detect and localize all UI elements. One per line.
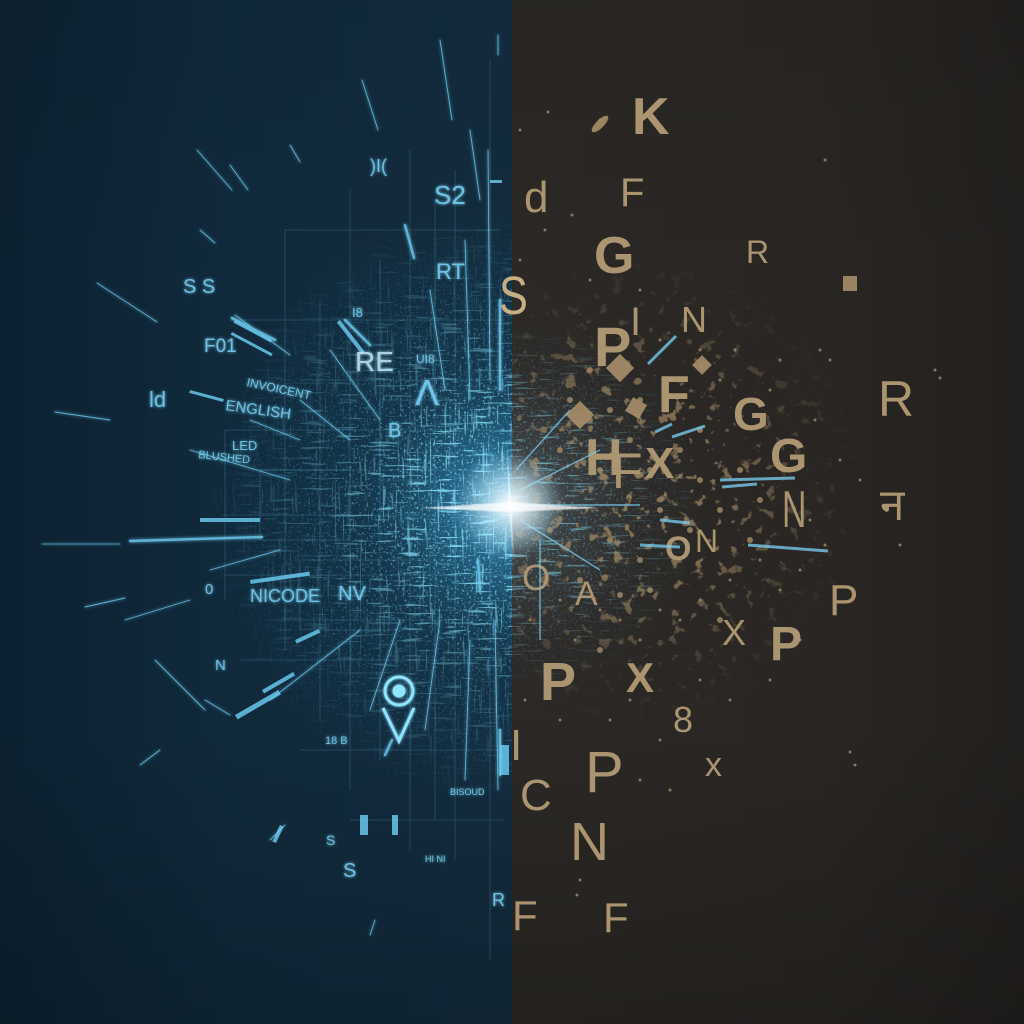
ancient rune characters: F xyxy=(512,892,538,939)
blue digital characters: INVOICENT xyxy=(245,375,313,403)
ancient rune characters: N xyxy=(681,299,707,340)
ancient rune characters: H xyxy=(585,429,623,487)
blue digital characters: Λ xyxy=(415,372,439,413)
blue digital characters: )I( xyxy=(370,156,387,176)
ancient rune characters: A xyxy=(575,575,598,613)
blue digital characters: ENGLISH xyxy=(224,397,292,423)
blue digital characters: LED xyxy=(232,438,257,453)
ancient rune characters: R xyxy=(878,371,914,427)
ancient rune characters: F xyxy=(603,894,629,941)
blue digital characters: S xyxy=(326,832,335,848)
ancient rune characters: S xyxy=(499,267,528,326)
ancient rune characters: O xyxy=(665,530,691,568)
blue digital characters: BLUSHED xyxy=(198,449,251,466)
ancient rune characters: d xyxy=(524,173,548,222)
ancient rune characters: G xyxy=(594,227,634,285)
ancient rune characters: I xyxy=(510,721,522,770)
ancient rune characters: N xyxy=(570,812,609,872)
ancient rune characters: P xyxy=(594,315,631,378)
ancient rune characters: K xyxy=(632,88,670,146)
rays of blue light xyxy=(42,35,500,935)
ancient rune characters: X xyxy=(722,612,746,653)
blue data dashes xyxy=(189,180,509,843)
ancient rune characters: P xyxy=(585,740,624,805)
ancient rune characters: O xyxy=(522,557,550,598)
central light burst xyxy=(420,445,600,565)
ancient rune characters: G xyxy=(770,430,807,483)
ancient rune characters: F xyxy=(658,366,690,424)
blue digital characters: I8 xyxy=(352,305,363,320)
blue digital characters: S2 xyxy=(434,180,466,210)
blue digital characters: HI NI xyxy=(425,854,446,864)
ancient rune characters: F xyxy=(612,443,643,499)
ancient rune characters: X xyxy=(626,654,654,701)
ancient rune characters: G xyxy=(733,388,769,440)
ancient rune characters xyxy=(499,88,914,941)
blue digital characters: 18 B xyxy=(325,735,348,747)
ancient rune characters: P xyxy=(540,652,576,712)
blue digital characters: 0 xyxy=(205,581,213,598)
icon: glowing pin marker xyxy=(383,677,414,741)
panel: brown ancient half xyxy=(512,0,1024,1024)
blue digital characters: BISOUD xyxy=(450,787,485,797)
blue digital characters: NICODE xyxy=(250,586,320,606)
ancient rune characters: N xyxy=(695,523,718,559)
blue noise crossing into the tan half xyxy=(512,328,692,680)
ancient rune characters: X xyxy=(645,439,674,488)
blue digital characters: RT xyxy=(436,259,465,284)
ancient rune characters: C xyxy=(520,771,552,820)
ancient rune characters: x xyxy=(705,746,722,784)
blue digital characters: R xyxy=(492,890,505,910)
ancient rune characters: 8 xyxy=(673,699,693,740)
blue digital characters: NV xyxy=(338,583,366,605)
blue digital characters: F01 xyxy=(204,336,237,357)
ancient rune characters: R xyxy=(746,234,769,270)
tan diamond fragments xyxy=(566,113,857,429)
blue digital characters: N xyxy=(215,657,226,674)
blue digital characters: S xyxy=(343,860,356,882)
blue digital characters xyxy=(149,156,505,910)
tan crumbling fragments noise xyxy=(512,276,842,704)
blue digital characters: S S xyxy=(183,276,215,298)
ancient rune characters: F xyxy=(620,171,644,215)
ancient rune characters: N xyxy=(782,481,806,539)
ancient rune characters: न xyxy=(880,481,906,530)
wireframe grid lines xyxy=(222,60,505,960)
blue streaks crossing the tan side xyxy=(515,336,828,640)
tan speckles xyxy=(520,112,940,895)
fine blue data noise xyxy=(222,224,512,785)
ancient rune characters: P xyxy=(829,576,858,625)
ancient rune characters: P xyxy=(770,618,802,671)
blue digital characters: B xyxy=(388,420,401,442)
ancient rune characters: I xyxy=(630,300,641,344)
panel: blue digital half xyxy=(0,0,512,1024)
blue digital characters: ld xyxy=(149,387,166,412)
blue digital characters: UI8 xyxy=(416,352,435,366)
blue digital characters: RE xyxy=(355,346,394,377)
